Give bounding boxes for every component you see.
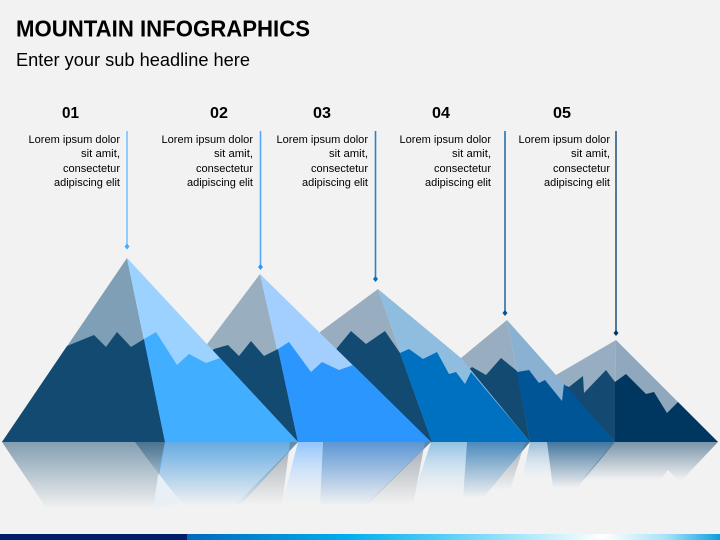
item 04: adipiscing elit [425, 177, 491, 189]
item 01: sit amit, [81, 148, 120, 160]
item 03 [276, 105, 378, 282]
item 03: 03 [313, 105, 331, 122]
item 05: adipiscing elit [544, 177, 610, 189]
mountain 02 [180, 274, 431, 442]
item 03: consectetur [311, 163, 368, 175]
item 04: sit amit, [452, 148, 491, 160]
item 05: 05 [553, 105, 571, 122]
item 02: consectetur [196, 163, 253, 175]
item 02: 02 [210, 105, 228, 122]
item 02: sit amit, [214, 148, 253, 160]
item 02 [162, 105, 263, 270]
item 01: consectetur [63, 163, 120, 175]
item 03: sit amit, [329, 148, 368, 160]
subtitle: Enter your sub headline here [16, 50, 250, 70]
item 05: Lorem ipsum dolor [518, 134, 610, 146]
item 05: consectetur [553, 163, 610, 175]
item 04: Lorem ipsum dolor [400, 134, 491, 146]
mountain 01 [2, 258, 298, 442]
item 02: Lorem ipsum dolor [162, 134, 253, 146]
item 01 [28, 105, 130, 250]
item 01: Lorem ipsum dolor [28, 134, 120, 146]
item 03: Lorem ipsum dolor [276, 134, 368, 146]
mountain reflections [2, 442, 718, 509]
item 04: 04 [432, 105, 450, 122]
item 04 [400, 105, 508, 316]
item 02: adipiscing elit [187, 177, 253, 189]
item 01: 01 [62, 105, 79, 122]
item 03: adipiscing elit [302, 177, 368, 189]
footer bar [0, 534, 720, 540]
item 05 [518, 105, 618, 336]
mountain 03 [290, 289, 530, 442]
item 05: sit amit, [571, 148, 610, 160]
mountain 04 [440, 320, 615, 442]
reflection notch [660, 470, 678, 480]
title: MOUNTAIN INFOGRAPHICS [16, 16, 310, 42]
item 01: adipiscing elit [54, 177, 120, 189]
mountain 05 [540, 340, 718, 442]
item 04: consectetur [434, 163, 491, 175]
